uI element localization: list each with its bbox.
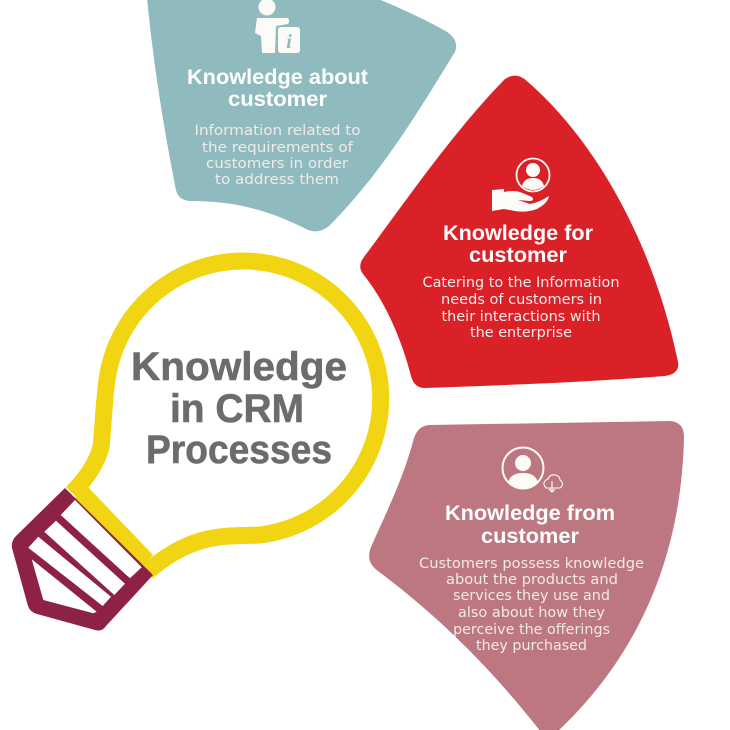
text block: Catering to the Information [422,275,620,291]
text block: their interactions with [442,309,600,325]
text block: customers in order [206,156,348,172]
icon: light bulb [12,261,381,630]
heading [443,222,593,267]
heading: customer [481,525,579,548]
panel: knowledge from customer [369,421,684,730]
text block [419,556,644,654]
panel: knowledge about customer [147,0,456,231]
text block: also about how they [458,605,605,621]
icon: person with info [255,0,300,53]
text block: the enterprise [470,325,572,341]
text block [422,275,620,341]
text block: Information related to [194,123,360,139]
heading: Knowledge from [445,502,615,525]
panel: knowledge for customer [360,76,678,388]
text block: to address them [215,172,339,188]
icon: person with cloud download [502,448,562,492]
text block [194,123,360,188]
heading: customer [469,244,567,267]
text block: needs of customers in [441,292,602,308]
text block: they purchased [476,638,587,654]
text block: the requirements of [202,140,354,156]
heading [187,66,368,111]
heading: customer [228,88,327,111]
title [131,345,347,472]
heading: Knowledge about [187,66,368,89]
bulb glass outline [72,261,381,572]
text block: services they use and [453,588,610,604]
title: in CRM [170,387,304,431]
heading [445,502,615,548]
heading: Knowledge for [443,222,593,245]
text block: Customers possess knowledge [419,556,644,572]
bulb base [12,488,153,630]
icon: person with info: i [286,31,292,53]
text block: perceive the offerings [453,622,610,638]
text block: about the products and [446,572,618,588]
icon: hand holding person [492,158,550,212]
title: Knowledge [131,345,347,389]
title: Processes [146,428,332,472]
